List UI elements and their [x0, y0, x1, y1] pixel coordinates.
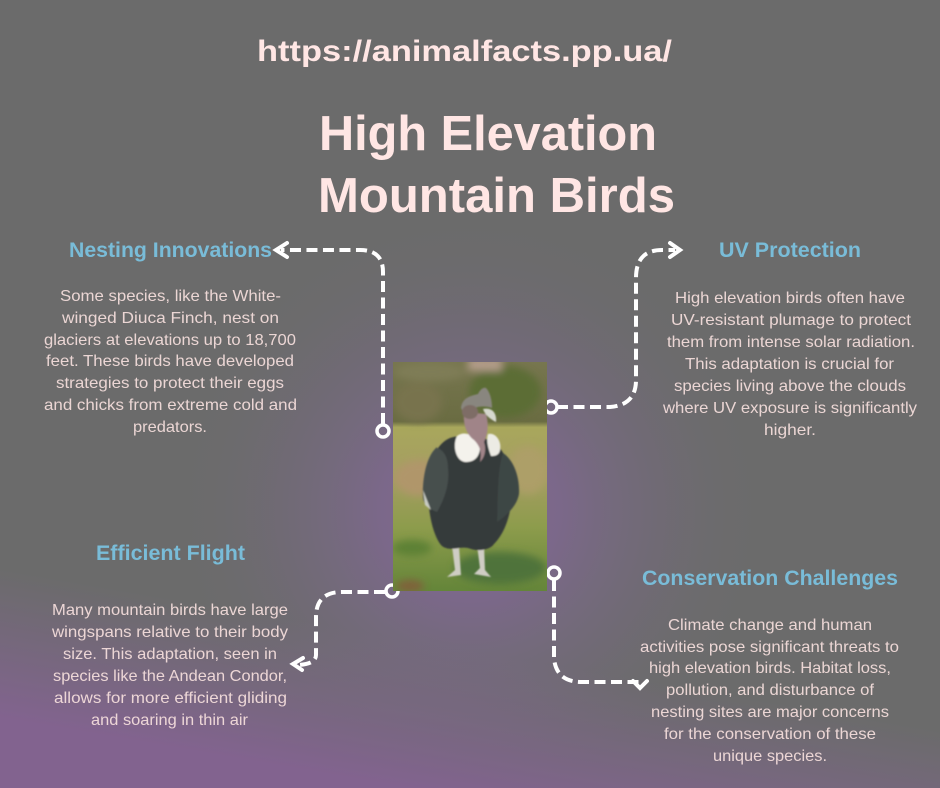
text: efficient flight: Many mountain birds have large: [52, 602, 288, 619]
ruff: [455, 434, 480, 462]
panel: efficient flight: [51, 542, 288, 729]
text: uv protection: High elevation birds often have: [675, 290, 905, 307]
text: conservation challenges: Climate change and human: [668, 617, 872, 634]
text: nesting innovations: predators.: [133, 419, 207, 436]
panel: uv protection: [662, 239, 917, 439]
text: efficient flight: allows for more efficient gliding: [54, 690, 287, 707]
body: [428, 436, 512, 550]
arrow: photo to nesting innovations: [276, 243, 389, 437]
text: efficient flight: and soaring in thin air: [91, 712, 249, 729]
text: uv protection: species living above the clouds: [674, 378, 906, 395]
panel: nesting innovations: [44, 239, 297, 436]
source url: https://animalfacts.pp.ua/: [257, 35, 673, 68]
beak: [483, 409, 496, 422]
text: nesting innovations: and chicks from extreme cold and: [44, 397, 297, 414]
text: uv protection: This adaptation is crucial for: [685, 356, 895, 373]
heading: efficient flight: Efficient Flight: [96, 542, 245, 565]
text: conservation challenges: unique species.: [713, 748, 827, 765]
text: uv protection: UV-resistant plumage to protect: [671, 312, 912, 329]
text: conservation challenges: nesting sites are major concerns: [651, 704, 889, 721]
text: conservation challenges: activities pose significant threats to: [640, 639, 899, 656]
title: [318, 107, 675, 223]
arrow: photo to uv protection: [545, 243, 680, 413]
text: uv protection: them from intense solar radiation.: [667, 334, 915, 351]
text: uv protection: higher.: [764, 422, 816, 439]
panel: conservation challenges: [640, 567, 899, 765]
right wing: [497, 453, 519, 522]
text: uv protection: where UV exposure is significantly: [662, 400, 917, 417]
text: efficient flight: [51, 602, 288, 729]
legs: [447, 546, 461, 577]
title: High Elevation: [319, 107, 657, 161]
text: nesting innovations: winged Diuca Finch, nest on: [61, 310, 279, 327]
heading: uv protection: UV Protection: [719, 239, 861, 262]
text: nesting innovations: strategies to protect their eggs: [56, 375, 284, 392]
text: efficient flight: wingspans relative to their body: [51, 624, 288, 641]
text: efficient flight: size. This adaptation, seen in: [63, 646, 277, 663]
neck: [464, 412, 488, 462]
left wing: [423, 447, 448, 512]
text: nesting innovations: feet. These birds have developed: [46, 353, 294, 370]
heading: nesting innovations: Nesting Innovations: [69, 239, 272, 262]
text: nesting innovations: [44, 288, 297, 436]
text: conservation challenges: high elevation birds. Habitat loss,: [649, 660, 891, 677]
text: uv protection: [662, 290, 917, 439]
text: nesting innovations: glaciers at elevations up to 18,700: [44, 332, 296, 349]
arrow: photo to efficient flight: [293, 585, 398, 670]
text: nesting innovations: Some species, like the White-: [60, 288, 281, 305]
head: [460, 387, 493, 410]
bird: [423, 388, 519, 577]
text: conservation challenges: [640, 617, 899, 765]
text: conservation challenges: for the conservation of these: [664, 726, 876, 743]
photo: andean condor: [392, 358, 548, 592]
heading: conservation challenges: Conservation Challenges: [642, 567, 898, 590]
title: Mountain Birds: [318, 169, 675, 223]
text: efficient flight: species like the Andean Condor,: [53, 668, 287, 685]
arrow: photo to conservation challenges: [548, 567, 647, 688]
text: conservation challenges: pollution, and disturbance of: [666, 682, 875, 699]
